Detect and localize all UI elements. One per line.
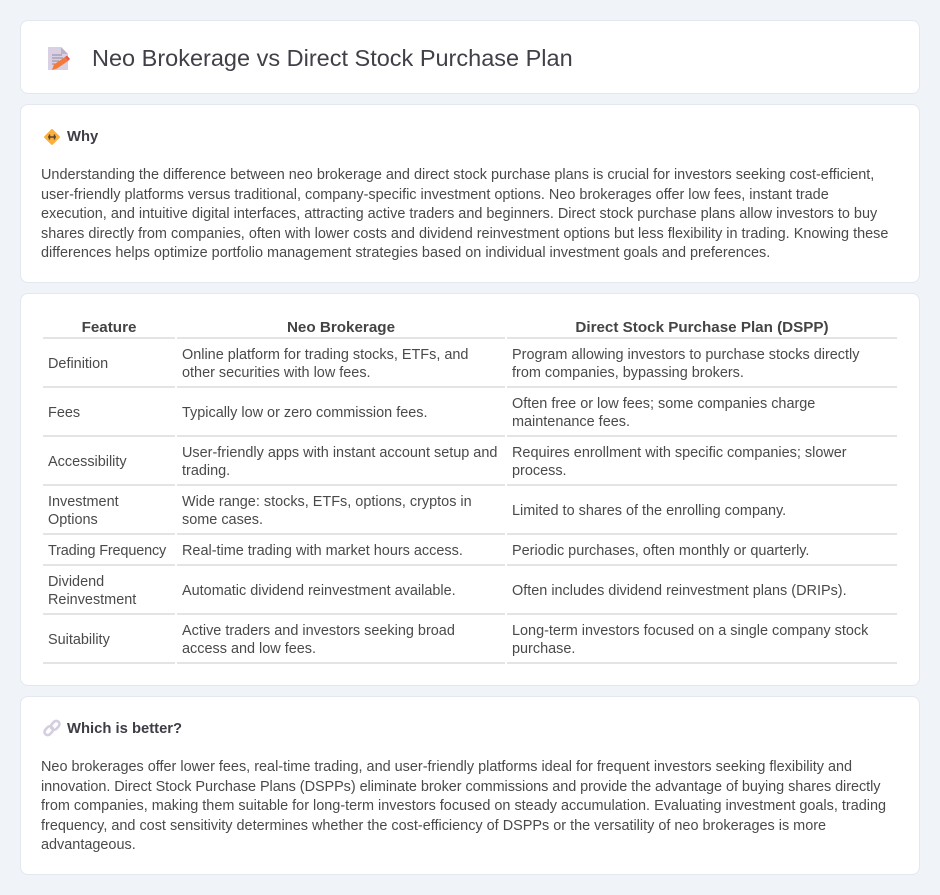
fees: neo brokerage: Typically low or zero commission fees.: [182, 405, 428, 421]
suitability: dspp: [512, 623, 868, 657]
dividend reinvestment: neo brokerage: Automatic dividend reinvestment available.: [182, 583, 456, 599]
row: trading frequency: Trading Frequency: [48, 543, 166, 559]
table header: dspp: Direct Stock Purchase Plan (DSPP): [575, 319, 829, 336]
row: definition: Definition: [48, 356, 108, 372]
dividend reinvestment: dspp: Often includes dividend reinvestment plans (DRIPs).: [512, 583, 847, 599]
table header: feature: Feature: [82, 319, 136, 336]
icon: warning diamond: [44, 129, 60, 145]
icon: document with pencil: [48, 47, 70, 70]
fees: dspp: maintenance fees.: [512, 414, 630, 430]
accessibility: neo brokerage: trading.: [182, 463, 230, 479]
investment options: neo brokerage: [182, 494, 472, 528]
accessibility: dspp: process.: [512, 463, 567, 479]
accessibility: neo brokerage: User-friendly apps with instant account setup and: [182, 445, 497, 461]
text: why paragraph: [41, 167, 888, 261]
panel: why: [20, 104, 920, 283]
investment options: neo brokerage: Wide range: stocks, ETFs, options, cryptos in: [182, 494, 472, 510]
accessibility: dspp: [512, 445, 847, 479]
row: dividend reinvestment: Reinvestment: [48, 592, 136, 608]
text: which is better paragraph: innovation. Direct Stock Purchase Plans (DSPPs) eliminate broker commissions and provide the advantage of buying shares directly: [41, 778, 880, 794]
text: which is better paragraph: from companies, making them suitable for long-term investors focused on steady accumulation. Evaluating investment goals, trading: [41, 798, 886, 814]
header card: [20, 20, 920, 94]
text: why paragraph: Understanding the difference between neo brokerage and direct stock purchase plans is crucial for investors seeking cost-efficient,: [41, 167, 874, 183]
suitability: neo brokerage: [182, 623, 455, 657]
suitability: dspp: purchase.: [512, 641, 575, 657]
trading frequency: dspp: Periodic purchases, often monthly or quarterly.: [512, 543, 809, 559]
row: accessibility: Accessibility: [48, 454, 127, 470]
row: dividend reinvestment: Dividend: [48, 574, 104, 590]
investment options: dspp: Limited to shares of the enrolling company.: [512, 503, 786, 519]
text: why paragraph: user-friendly platforms versus traditional, company-specific investment options. Neo brokerages offer low fees, instant trade: [41, 186, 829, 202]
definition: dspp: from companies, bypassing brokers.: [512, 365, 744, 381]
definition: dspp: [512, 347, 860, 381]
investment options: neo brokerage: some cases.: [182, 512, 263, 528]
table header: neo brokerage: Neo Brokerage: [287, 319, 395, 336]
definition: neo brokerage: Online platform for trading stocks, ETFs, and: [182, 347, 468, 363]
heading: which is better: Which is better?: [67, 721, 182, 737]
suitability: neo brokerage: access and low fees.: [182, 641, 316, 657]
row: investment options: [48, 494, 119, 528]
suitability: dspp: Long-term investors focused on a single company stock: [512, 623, 868, 639]
panel: comparison table: [20, 293, 920, 686]
heading: why: Why: [67, 129, 98, 145]
fees: dspp: [512, 396, 815, 430]
row: dividend reinvestment: [48, 574, 136, 608]
row: investment options: Investment: [48, 494, 119, 510]
suitability: neo brokerage: Active traders and investors seeking broad: [182, 623, 455, 639]
row: investment options: Options: [48, 512, 98, 528]
definition: neo brokerage: [182, 347, 468, 381]
definition: neo brokerage: other securities with low fees.: [182, 365, 371, 381]
fees: dspp: Often free or low fees; some companies charge: [512, 396, 815, 412]
accessibility: dspp: Requires enrollment with specific companies; slower: [512, 445, 847, 461]
text: which is better paragraph: [41, 759, 886, 853]
icon: link: [43, 720, 61, 736]
definition: dspp: Program allowing investors to purchase stocks directly: [512, 347, 859, 363]
text: which is better paragraph: Neo brokerages offer lower fees, real-time trading, and user-friendly platforms ideal for frequent investors seeking flexibility and: [41, 759, 852, 775]
trading frequency: neo brokerage: Real-time trading with market hours access.: [182, 543, 463, 559]
title: Neo Brokerage vs Direct Stock Purchase Plan: [92, 45, 573, 71]
text: which is better paragraph: advantageous.: [41, 837, 136, 853]
accessibility: neo brokerage: [182, 445, 497, 479]
row: suitability: Suitability: [48, 632, 110, 648]
text: why paragraph: execution, and intuitive digital interfaces, attracting active traders and beginners. Direct stock purchase plans allow investors to buy: [41, 206, 877, 222]
panel: which is better: [20, 696, 920, 875]
text: which is better paragraph: frequency, and cost sensitivity determines whether the cost-efficiency of DSPPs or the versatility of neo brokerages is more: [41, 818, 826, 834]
text: why paragraph: differences helps optimize portfolio management strategies based on individual investment goals and preferences.: [41, 245, 770, 261]
row: fees: Fees: [48, 405, 80, 421]
text: why paragraph: shares directly from companies, often with lower costs and dividend reinvestment options but less flexibility in trading. Knowing these: [41, 226, 888, 242]
